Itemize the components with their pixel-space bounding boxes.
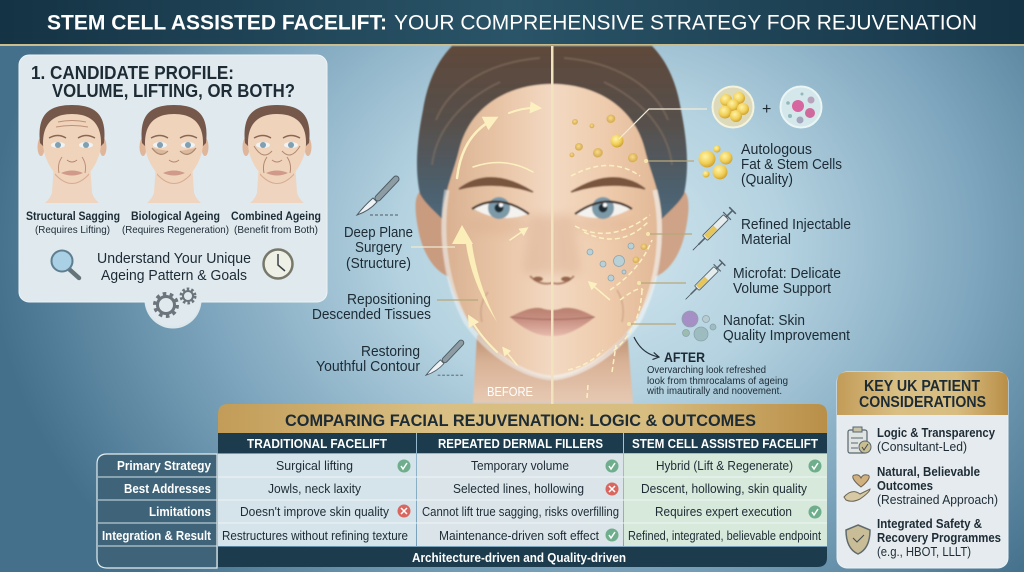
panel: key uk patient considerations [837, 372, 1008, 568]
column: stem cell assisted facelift: Requires expert execution [655, 505, 792, 519]
item: natural outcomes: (Restrained Approach) [877, 493, 998, 507]
label: repositioning [312, 292, 478, 323]
panel: candidate profile [19, 55, 327, 328]
column: stem cell assisted facelift [624, 433, 827, 546]
icon: shield [846, 525, 870, 554]
left callouts [312, 179, 478, 375]
label: refined injectable [741, 217, 851, 248]
item: integrated safety: Integrated Safety & [877, 517, 982, 531]
column: traditional facelift: Doesn't improve skin quality [240, 505, 390, 519]
column: repeated dermal fillers [417, 433, 623, 546]
caption: biological ageing: Biological Ageing [131, 211, 220, 223]
right callouts [619, 86, 851, 397]
label: repositioning: Descended Tissues [312, 307, 431, 323]
text: understand your pattern [97, 250, 251, 284]
icon: fat cell circle [712, 86, 754, 128]
status icons [398, 460, 822, 542]
caption: combined ageing [231, 211, 321, 236]
title bar: STEM CELL ASSISTED FACELIFT: [47, 12, 387, 34]
caption: structural sagging: (Requires Lifting) [35, 224, 110, 236]
caption: structural sagging [26, 211, 120, 236]
icon: heart in hand [844, 475, 870, 501]
item: natural outcomes: Natural, Believable [877, 465, 980, 479]
column: stem cell assisted facelift: Refined, integrated, believable endpoint [628, 529, 821, 543]
caption: biological ageing: (Requires Regeneration) [122, 224, 229, 236]
label: autologous fat and stem cells: Fat & Stem Cells [741, 157, 842, 173]
arrow to after [634, 337, 659, 357]
item: logic and transparency [877, 426, 995, 454]
label: deep plane surgery: Deep Plane [344, 225, 413, 241]
icon: gears [155, 289, 195, 316]
column: repeated dermal fillers: Maintenance-driven soft effect [439, 529, 599, 543]
label: restoring contour [316, 344, 420, 375]
before label: BEFORE [487, 385, 533, 399]
column: stem cell assisted facelift: Hybrid (Lift & Regenerate) [656, 459, 793, 473]
column: stem cell assisted facelift: Descent, hollowing, skin quality [641, 482, 808, 496]
central face illustration [416, 46, 688, 404]
icon: fat and stem cells cluster [698, 146, 732, 180]
face: structural sagging [38, 105, 106, 203]
column: traditional facelift: Jowls, neck laxity [268, 482, 362, 496]
label: autologous fat and stem cells [741, 142, 842, 188]
after label and description: with imautirally and noovement. [646, 386, 782, 397]
label: microfat: Microfat: Delicate [733, 266, 841, 282]
panel heading [31, 63, 295, 101]
table footer [218, 547, 827, 567]
before and after divider [551, 46, 554, 404]
item: integrated safety: (e.g., HBOT, LLLT) [877, 545, 971, 559]
column: stem cell assisted facelift: STEM CELL ASSISTED FACELIFT [632, 437, 818, 451]
panel heading: CONSIDERATIONS [859, 394, 986, 411]
icon: clock [264, 250, 292, 278]
label: microfat: Volume Support [733, 281, 831, 297]
regeneration dots and dashed contour lines [568, 114, 652, 398]
item: natural outcomes [877, 465, 998, 507]
panel heading: 1. CANDIDATE PROFILE: [31, 63, 234, 83]
caption: combined ageing: Combined Ageing [231, 211, 321, 223]
title bar: YOUR COMPREHENSIVE STRATEGY FOR REJUVENATION [394, 12, 977, 34]
label: autologous fat and stem cells: Autologous [741, 142, 812, 158]
label: nanofat [723, 313, 850, 344]
label: restoring contour: Restoring [361, 344, 420, 360]
label: restoring contour: Youthful Contour [316, 359, 420, 375]
row label column: Best Addresses [124, 482, 211, 496]
column: repeated dermal fillers: Selected lines, hollowing [453, 482, 584, 496]
caption: biological ageing [122, 211, 229, 236]
label: refined injectable: Refined Injectable [741, 217, 851, 233]
label: microfat [733, 266, 841, 297]
left eyebrow and eye [459, 178, 533, 219]
after label and description: Overvarching look refreshed [647, 365, 766, 376]
lips [510, 308, 595, 336]
icon: syringe microfat [682, 259, 726, 303]
caption: structural sagging: Structural Sagging [26, 211, 120, 223]
label: nanofat: Quality Improvement [723, 328, 850, 344]
label: refined injectable: Material [741, 232, 791, 248]
column: traditional facelift: TRADITIONAL FACELIFT [247, 437, 387, 451]
column: repeated dermal fillers: REPEATED DERMAL FILLERS [438, 437, 603, 451]
item: integrated safety [877, 517, 1001, 559]
row label column: Primary Strategy [117, 459, 211, 473]
icon: scalpel upper [357, 179, 398, 215]
plus sign: + [762, 101, 771, 118]
item: logic and transparency: (Consultant-Led) [877, 440, 967, 454]
panel heading [837, 372, 1008, 415]
face: biological ageing [140, 105, 208, 203]
icon: clipboard [848, 427, 871, 453]
icon: syringe refined [689, 207, 736, 254]
row label column: Integration & Result [102, 529, 212, 543]
label: deep plane surgery: Surgery [355, 240, 403, 256]
title bar [0, 0, 1024, 46]
row label column [97, 454, 217, 568]
icon: stem cell circle [780, 86, 822, 128]
text: understand your pattern: Ageing Pattern & Goals [101, 267, 247, 284]
icon: scalpel lower [426, 343, 463, 375]
column: repeated dermal fillers: Temporary volume [471, 459, 569, 473]
column: traditional facelift [218, 433, 416, 546]
after label and description [646, 349, 788, 397]
icon: magnifier [52, 250, 79, 278]
item: integrated safety: Recovery Programmes [877, 531, 1001, 545]
table title bar: COMPARING FACIAL REJUVENATION: LOGIC & OUTCOMES [285, 411, 756, 430]
label: nanofat: Nanofat: Skin [723, 313, 805, 329]
label: deep plane surgery [344, 225, 455, 272]
right eyebrow and eye [571, 178, 645, 219]
text: understand your pattern: Understand Your Unique [97, 250, 251, 267]
column: repeated dermal fillers: Cannot lift true sagging, risks overfilling [422, 505, 619, 519]
table title bar [218, 404, 827, 433]
panel heading: VOLUME, LIFTING, OR BOTH? [52, 81, 295, 101]
label: deep plane surgery: (Structure) [346, 256, 411, 272]
panel heading: KEY UK PATIENT [864, 378, 980, 395]
label: repositioning: Repositioning [347, 292, 431, 308]
lifting arrows [452, 108, 538, 365]
icon: nanofat cells [682, 311, 716, 341]
caption: combined ageing: (Benefit from Both) [234, 224, 318, 236]
table footer: Architecture-driven and Quality-driven [412, 551, 626, 565]
row label column: Limitations [149, 505, 211, 519]
label: autologous fat and stem cells: (Quality) [741, 172, 793, 188]
column: traditional facelift: Restructures without refining texture [222, 529, 408, 543]
after label and description: look from thmrocalams of ageing [647, 376, 788, 387]
item: natural outcomes: Outcomes [877, 479, 933, 493]
column: traditional facelift: Surgical lifting [276, 459, 353, 473]
panel: comparison table [97, 404, 827, 568]
item: logic and transparency: Logic & Transparency [877, 426, 995, 440]
face: combined ageing [242, 105, 312, 203]
after label and description: AFTER [664, 349, 705, 365]
